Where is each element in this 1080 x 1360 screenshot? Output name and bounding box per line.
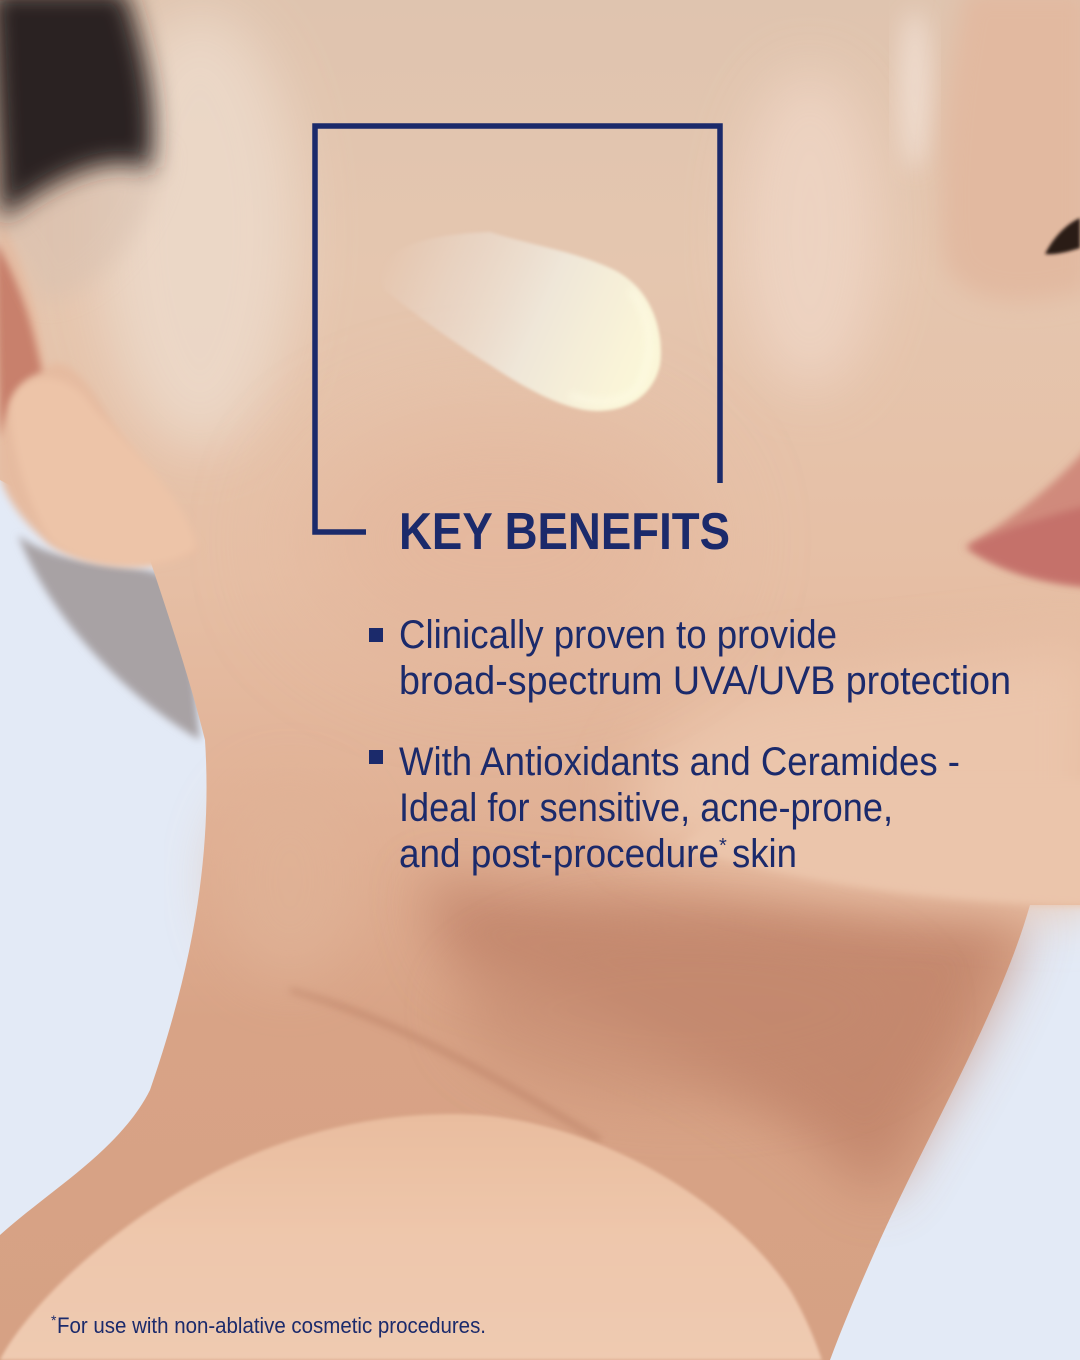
nostril [1045,218,1080,254]
ear inner shadow [0,240,42,440]
heading: key benefits: KEY BENEFITS [399,503,730,561]
neck lit strip [220,780,360,980]
cream rim highlight [570,290,649,402]
benefit 2 text: Ideal for sensitive, acne-prone, [399,786,893,830]
benefit 1 text: broad-spectrum UVA/UVB protection [399,659,1011,703]
benefit 2 text: and post-procedure [399,832,719,876]
lips [965,445,1080,586]
lower lip [968,505,1080,586]
ear lobe [10,378,197,566]
cream swatch [381,232,661,411]
benefit 2 text: skin [732,832,797,876]
hair [0,0,153,220]
navy bracket frame [315,126,720,532]
benefit 1 [369,613,1011,703]
lower jaw lit area [631,640,1080,907]
cheek warm tone [300,420,700,660]
hairline fade [0,150,165,300]
bullet 1 [369,628,383,642]
ear rim [0,215,200,564]
neck mid shadow [460,920,920,1100]
footnote: * [51,1312,57,1328]
benefit 2 text [399,740,960,876]
cheek highlight [740,70,880,390]
bullet 2 [369,750,383,764]
forehead-side pale tone [100,10,300,450]
jaw edge [680,780,1080,906]
neck crease [290,990,600,1140]
benefit 1 text: Clinically proven to provide [399,613,837,657]
nose highlight [899,10,931,170]
cream smear [381,232,661,411]
benefit 1 text [399,613,1011,703]
footnote: For use with non-ablative cosmetic procedures. [57,1313,486,1338]
benefit 2 text: * [719,835,727,857]
neck shadow under jaw [420,880,1025,1200]
nose [941,0,1080,301]
benefit 2 text: With Antioxidants and Ceramides - [399,740,960,784]
shoulder [0,1114,822,1360]
blurred grey hair [18,535,200,740]
benefit 2 [369,740,960,876]
